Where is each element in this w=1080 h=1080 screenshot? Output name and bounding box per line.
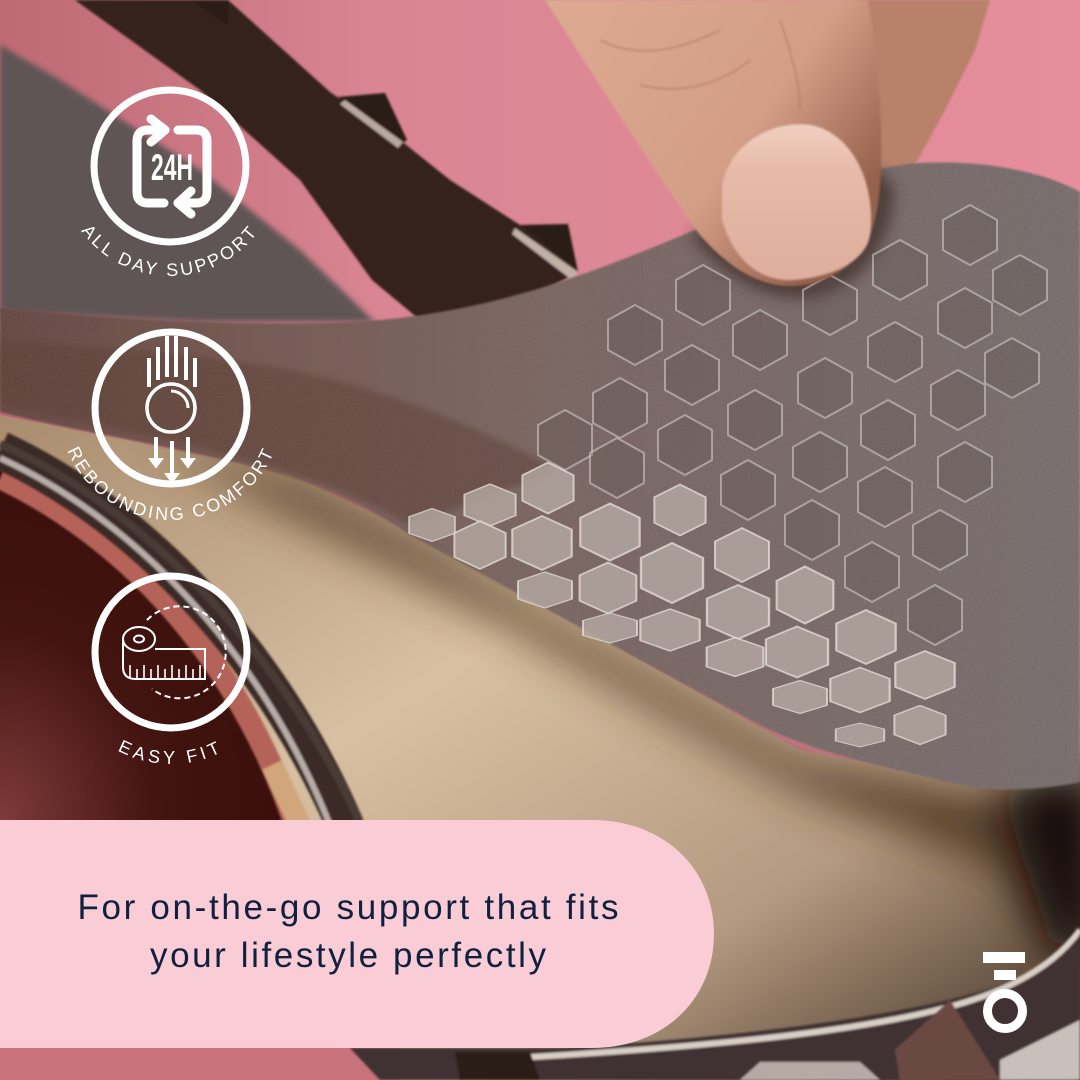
logo (983, 952, 1025, 1028)
callout text (78, 888, 618, 975)
photo: second finger (860, 0, 990, 175)
photo: metallic studded strap, lower right (350, 925, 1080, 1080)
photo: shadow under insole (150, 440, 1080, 1000)
photo: insole highlight crease (0, 340, 560, 525)
photo: gel honeycomb, dim upper cells (538, 205, 1047, 645)
photo: beige shoe interior (0, 415, 1080, 1080)
photo: bottom pink strip (0, 1040, 400, 1080)
photo: fingertip shadow on insole (690, 170, 895, 298)
photo: metallic shoe rim (0, 444, 360, 825)
photo: insole fabric grain (0, 160, 1080, 800)
icon: rebounding comfort (68, 328, 272, 520)
callout text: your lifestyle perfectly (150, 936, 546, 975)
icon: all day support: ALL DAY SUPPORT (81, 226, 254, 276)
icon: easy fit (92, 572, 250, 764)
icon: rebounding comfort: REBOUNDING COMFORT (68, 446, 272, 520)
icon: all day support (81, 86, 254, 276)
photo: fingernail (722, 124, 871, 280)
pink callout panel (0, 820, 714, 1048)
photo: main finger with nail (545, 0, 881, 286)
photo: grey suede shoe lining (0, 45, 375, 322)
photo: lower-left shoe inner side (0, 470, 285, 820)
icon: easy fit: EASY FIT (118, 740, 217, 764)
photo: gel insole body (0, 162, 1080, 789)
icon: all day support: 24H (151, 147, 193, 188)
photo: gel honeycomb, bright lower cells (409, 462, 955, 747)
photo: dark studded strap (75, 0, 578, 320)
callout text: For on-the-go support that fits (78, 888, 618, 927)
photo: shoe interior dark right (1000, 770, 1080, 960)
